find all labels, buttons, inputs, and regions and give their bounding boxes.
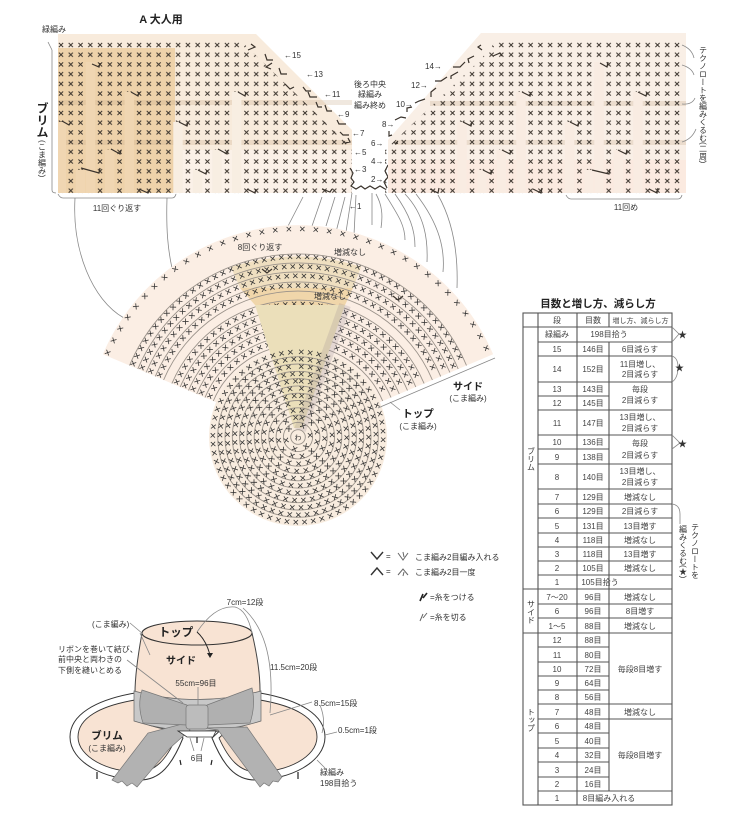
hat illustration: リボンを巻いて結び、 (58, 644, 138, 654)
stitch count table: 131目 (582, 522, 604, 531)
hat illustration: 前中央と両わきの (58, 654, 122, 664)
ribbon right tail (205, 727, 282, 787)
row label: row 11: 11回め (614, 203, 638, 212)
arrow to crown (197, 632, 210, 655)
hat illustration: 0.5cm=1段 (338, 726, 377, 735)
stitch count table (523, 313, 672, 805)
center join stitches (350, 165, 388, 189)
stitch count table: 6目減らす (622, 344, 658, 354)
fan stitches: ×××××××××××××××××××××××××××× (198, 334, 396, 396)
stitch count table: 13 (553, 385, 562, 394)
stitch count table: 10 (553, 438, 562, 447)
stitch count table: 8 (555, 693, 560, 702)
chart: brim left wing: ←13 (306, 70, 323, 79)
chart: brim right wing: 6→ (371, 139, 383, 148)
fan background (103, 225, 493, 437)
stitch legend: = (386, 567, 391, 576)
stitch count table: 32目 (585, 751, 601, 760)
stitch count table: 105目拾う (581, 577, 619, 587)
chart: brim right wing: 8→ (382, 120, 394, 129)
title: A 大人用 (139, 12, 183, 26)
stitch count table: 13目増し、 (620, 412, 660, 422)
crown (135, 633, 260, 732)
stitch count table: 11目増し、 (620, 359, 660, 369)
stitch count table: 2目減らす (622, 506, 658, 516)
stitch count table: サイド (526, 600, 536, 624)
stitch count table: 11 (553, 419, 562, 428)
chart: brim right wing: 2→ (371, 175, 383, 184)
row label: row 11 (566, 195, 682, 212)
stitch count table: 16目 (585, 780, 601, 789)
stitch count table: 88目 (585, 636, 601, 645)
hat illustration: 緑編み (320, 767, 344, 777)
stitch count table: 129目 (582, 493, 604, 502)
hat illustration: (こま編み) (92, 619, 130, 629)
stitch count table: 1 (555, 578, 560, 587)
brim right lobe (212, 693, 325, 780)
stitch count table: 増し方、減らし方 (612, 316, 668, 325)
vertical note: wrap wire (682, 45, 708, 164)
stitch count table: 2目減らす (622, 450, 658, 460)
hat illustration: 198目拾う (320, 778, 357, 788)
stitch count table: 136目 (582, 438, 604, 447)
top label: トップ (402, 408, 434, 420)
stitch count table: 56目 (585, 693, 601, 702)
stitch legend: = (386, 552, 391, 561)
left wing background (58, 34, 352, 193)
hat illustration: 6目 (191, 754, 203, 763)
stitch count table: 9 (555, 453, 560, 462)
repeat label: 11 rows: 11回ぐり返す (93, 204, 141, 213)
hat illustration (58, 598, 377, 788)
fan stitches: ××××××××××××××××××××××××××××××××××× (174, 301, 419, 385)
stitch count table: 4 (555, 536, 560, 545)
fan stitches: ××××××××××××××××××××××××××××××××××××××××××× (148, 273, 446, 374)
stitch count table: 48目 (585, 722, 601, 731)
circle stitches: ××××××××××××××××××××××××××××××××××××××××××××××××××××××××× (218, 356, 378, 518)
fan stitches: ×××××××××××××××××××××××××××××××××××××××× (156, 283, 436, 378)
left wing shaping arrows: ←15 (284, 51, 301, 60)
table star callouts: 編みくるむ(★) (678, 524, 688, 579)
stitch count table: 増減なし (624, 492, 656, 502)
stitch count table: 6 (555, 607, 560, 616)
table star callouts: ★ (675, 363, 684, 373)
stitch count table: 2目減らす (622, 395, 658, 405)
stitch count table: 毎段8目増す (618, 750, 662, 760)
table star callouts: ★ (678, 439, 687, 449)
chart: side crown fan: 増減なし (334, 247, 366, 257)
side label: サイド (453, 381, 483, 393)
brim label: ブリム (35, 101, 49, 138)
stitch count table: 6 (555, 507, 560, 516)
stitch count table: 105目 (582, 564, 604, 573)
right wing increase gaps (457, 62, 643, 193)
stitch count table: 48目 (585, 708, 601, 717)
hat illustration: 8.5cm=15段 (314, 699, 357, 708)
hat illustration: サイド (166, 655, 196, 667)
stitch count table: 143目 (582, 385, 604, 394)
top label (390, 402, 437, 431)
leader lines between brim and crown (75, 193, 457, 318)
fan repeat band (231, 256, 361, 288)
stitch legend: こま編み2目編み入れる (415, 552, 499, 562)
stitch count table: 5 (555, 737, 560, 746)
stitch count table: 1 (555, 794, 560, 803)
circle stitches: ×××××××××××××××××××××××××××××××××××××××××××××× (232, 371, 364, 502)
stitch count table: 1〜5 (549, 622, 566, 631)
edging label: 緑編み (42, 24, 66, 34)
fan stitches: ×××××××××××××××××××××××××××××× (190, 325, 402, 392)
chart: brim right wing (354, 33, 686, 195)
table grid (523, 313, 672, 805)
hat illustration: (こま編み) (88, 743, 126, 753)
stitch count table: 3 (555, 766, 560, 775)
stitch count table: 64目 (585, 679, 601, 688)
brim rows: 緑編み (545, 329, 569, 339)
stitch count table: 増減なし (624, 535, 656, 545)
stitch count table: 6 (555, 722, 560, 731)
hat illustration: 11.5cm=20段 (270, 663, 317, 672)
stitch count table: 24目 (585, 766, 601, 775)
repeat label: 11 rows (58, 194, 176, 213)
hat illustration: 55cm=96目 (175, 679, 217, 688)
chart: brim left wing: ←1 (349, 202, 362, 211)
chart: brim right wing: 10→ (396, 100, 413, 109)
stitch count table: 毎段 (632, 384, 648, 394)
stitch count table: 14 (553, 365, 562, 374)
chart: brim right wing: 編み終め (354, 100, 386, 110)
ribbon right loop (207, 688, 254, 725)
fan stitches: ×××××××××××××××××××××××××××××××××××××××××××××××× (130, 254, 462, 367)
stitch count table: 80目 (585, 651, 601, 660)
vertical note: wrap wire: テクノロートを編みくるむ(二周) (698, 46, 708, 164)
left wing stitch marks (62, 63, 332, 193)
hat illustration: 下側を縫いとめる (58, 665, 122, 675)
stitch count table: 40目 (585, 737, 601, 746)
decrease symbol (371, 568, 383, 575)
stitch count table: 11 (553, 651, 562, 660)
stitch count table: 152目 (582, 365, 604, 374)
ribbon knot (186, 705, 208, 729)
circle stitches: ××××××××××××××××××××××××××××××××××××××××××××××××××× (225, 364, 371, 510)
chart: brim left wing: ←3 (354, 165, 367, 174)
stitch count table: 3 (555, 550, 560, 559)
table header: 段 (553, 316, 561, 325)
stitch count table: 増減なし (624, 621, 656, 631)
circle background (209, 348, 387, 526)
right wing background (388, 33, 686, 193)
left wing stitches (55, 40, 355, 195)
stitch count table: 96目 (585, 593, 601, 602)
side rows: 7〜20 (546, 593, 568, 602)
stitch count table: 140目 (582, 473, 604, 482)
chart: brim left wing: ←5 (354, 148, 367, 157)
chart: side crown fan (103, 225, 493, 402)
center ring symbol: わ (294, 434, 302, 442)
stitch count table: 88目 (585, 622, 601, 631)
stitch count table: 5 (555, 522, 560, 531)
ribbon left loop (140, 690, 187, 725)
fan stitches: ××××××××××××××××××××××××××××××××× (182, 318, 412, 388)
stitch count table: 4 (555, 751, 560, 760)
side label (378, 358, 495, 408)
brim label (35, 42, 56, 193)
tan wedge (255, 305, 345, 428)
chart: brim left wing: ←11 (324, 90, 341, 99)
top label: (こま編み) (399, 421, 437, 431)
stitch count table: 増減なし (624, 563, 656, 573)
chart: brim right wing: 12→ (411, 81, 428, 90)
hat illustration: トップ (159, 626, 194, 639)
stitch count table: 7 (555, 493, 560, 502)
top rows: 12 (553, 636, 562, 645)
chart: side crown fan: 増減なし (314, 291, 346, 301)
fan stitches: ×××××××××××××××××××××××××××××××××××× (104, 226, 490, 356)
fan stitches: ×××××××××××××××××××××××××××××××××××××××××××××× (139, 264, 456, 370)
stitch count table: 毎段8目増す (618, 664, 662, 674)
chart: brim left wing: ←7 (352, 129, 365, 138)
stitch count table: 9 (555, 679, 560, 688)
stitch count table: 118目 (583, 550, 603, 559)
stitch count table: 13目増す (624, 549, 656, 559)
increase symbol (371, 552, 383, 559)
chart: brim left wing: ←9 (337, 110, 350, 119)
stitch count table: 10 (553, 665, 562, 674)
stitch legend: =糸をつける (430, 592, 475, 602)
circle stitches: ×××××××××××××××××××××××××××××××××××××××××××××××××××××××××××××× (210, 350, 386, 525)
stitch count table: 118目 (583, 536, 603, 545)
left wing increase gaps (58, 62, 134, 193)
stitch count table: 8目増す (626, 606, 654, 616)
ribbon left tail (112, 723, 190, 787)
circle ring lines (218, 357, 378, 517)
chart: top circle (209, 303, 387, 526)
stitch legend (371, 552, 499, 622)
hat leader lines (127, 607, 337, 768)
stitch count table: 2目減らす (622, 423, 658, 433)
stitch count table: 増減なし (624, 592, 656, 602)
fan stitches: ××××××××××××××××××××××××× (207, 343, 386, 399)
circle stitches: ××××××××××××××××××××××××××××××××××× (246, 386, 350, 488)
right wing stitch marks (430, 62, 658, 193)
fan ring lines (130, 254, 466, 401)
circle stitches: ×××××××××××××××××××××××××××××××××××××××× (240, 378, 356, 496)
chart: brim left wing (55, 34, 388, 211)
ribbon band (134, 691, 261, 731)
wire note: テクノロートを (690, 523, 700, 579)
circle stitches (210, 350, 386, 525)
stitch count table: 2 (555, 780, 560, 789)
table section labels: ブリム (526, 446, 536, 471)
stitch count table: 12 (553, 399, 562, 408)
stitch count table: 13目増し、 (620, 466, 660, 476)
stitch legend: こま編み2目一度 (415, 567, 475, 577)
right wing shaping arrows: 14→ (425, 62, 442, 71)
stitch count table: 増減なし (624, 707, 656, 717)
stitch count table: 毎段 (632, 438, 648, 448)
side label: (こま編み) (449, 393, 487, 403)
stitch count table: 8 (555, 473, 560, 482)
stitch count table: 138目 (582, 453, 604, 462)
hat labels: 7cm=12段 (227, 598, 263, 607)
stitch count table: 146目 (582, 345, 604, 354)
thread markers (97, 737, 298, 779)
stitch count table: 198目拾う (590, 329, 628, 339)
stitch count table: 13目増す (624, 521, 656, 531)
stitch count table: トップ (526, 708, 536, 732)
join yarn symbol (420, 593, 427, 601)
table star callouts (672, 327, 700, 579)
stitch count table: 2 (555, 564, 560, 573)
stitch count table: 目数 (585, 315, 601, 325)
stitch legend: =糸を切る (430, 612, 467, 622)
chart: brim right wing: 4→ (371, 157, 383, 166)
hat illustration: ブリム (91, 729, 123, 742)
right wing stitches (385, 40, 685, 195)
chart: brim right wing: 緑編み (358, 89, 382, 99)
back center label: 後ろ中央 (354, 79, 386, 89)
stitch count table: 2目減らす (622, 477, 658, 487)
crown top (142, 621, 252, 645)
stitch count table: 7 (555, 708, 560, 717)
front notch (178, 731, 216, 737)
brim label: (こま編み) (38, 140, 46, 178)
stitch count table: 129目 (582, 507, 604, 516)
brim left lobe (70, 693, 183, 780)
stitch count table: 72目 (585, 665, 601, 674)
stitch count table: 96目 (585, 607, 601, 616)
stitch count table: 15 (553, 345, 562, 354)
table star callouts: ★ (678, 330, 687, 340)
stitch count table: 8目編み入れる (583, 793, 635, 803)
stitch count table: 2目減らす (622, 369, 658, 379)
fan labels: 8回ぐり返す (238, 243, 282, 252)
table title: 目数と増し方、減らし方 (540, 297, 656, 310)
stitch count table: 147目 (582, 419, 604, 428)
cut yarn symbol (420, 613, 427, 621)
stitch count table: 145目 (582, 399, 604, 408)
